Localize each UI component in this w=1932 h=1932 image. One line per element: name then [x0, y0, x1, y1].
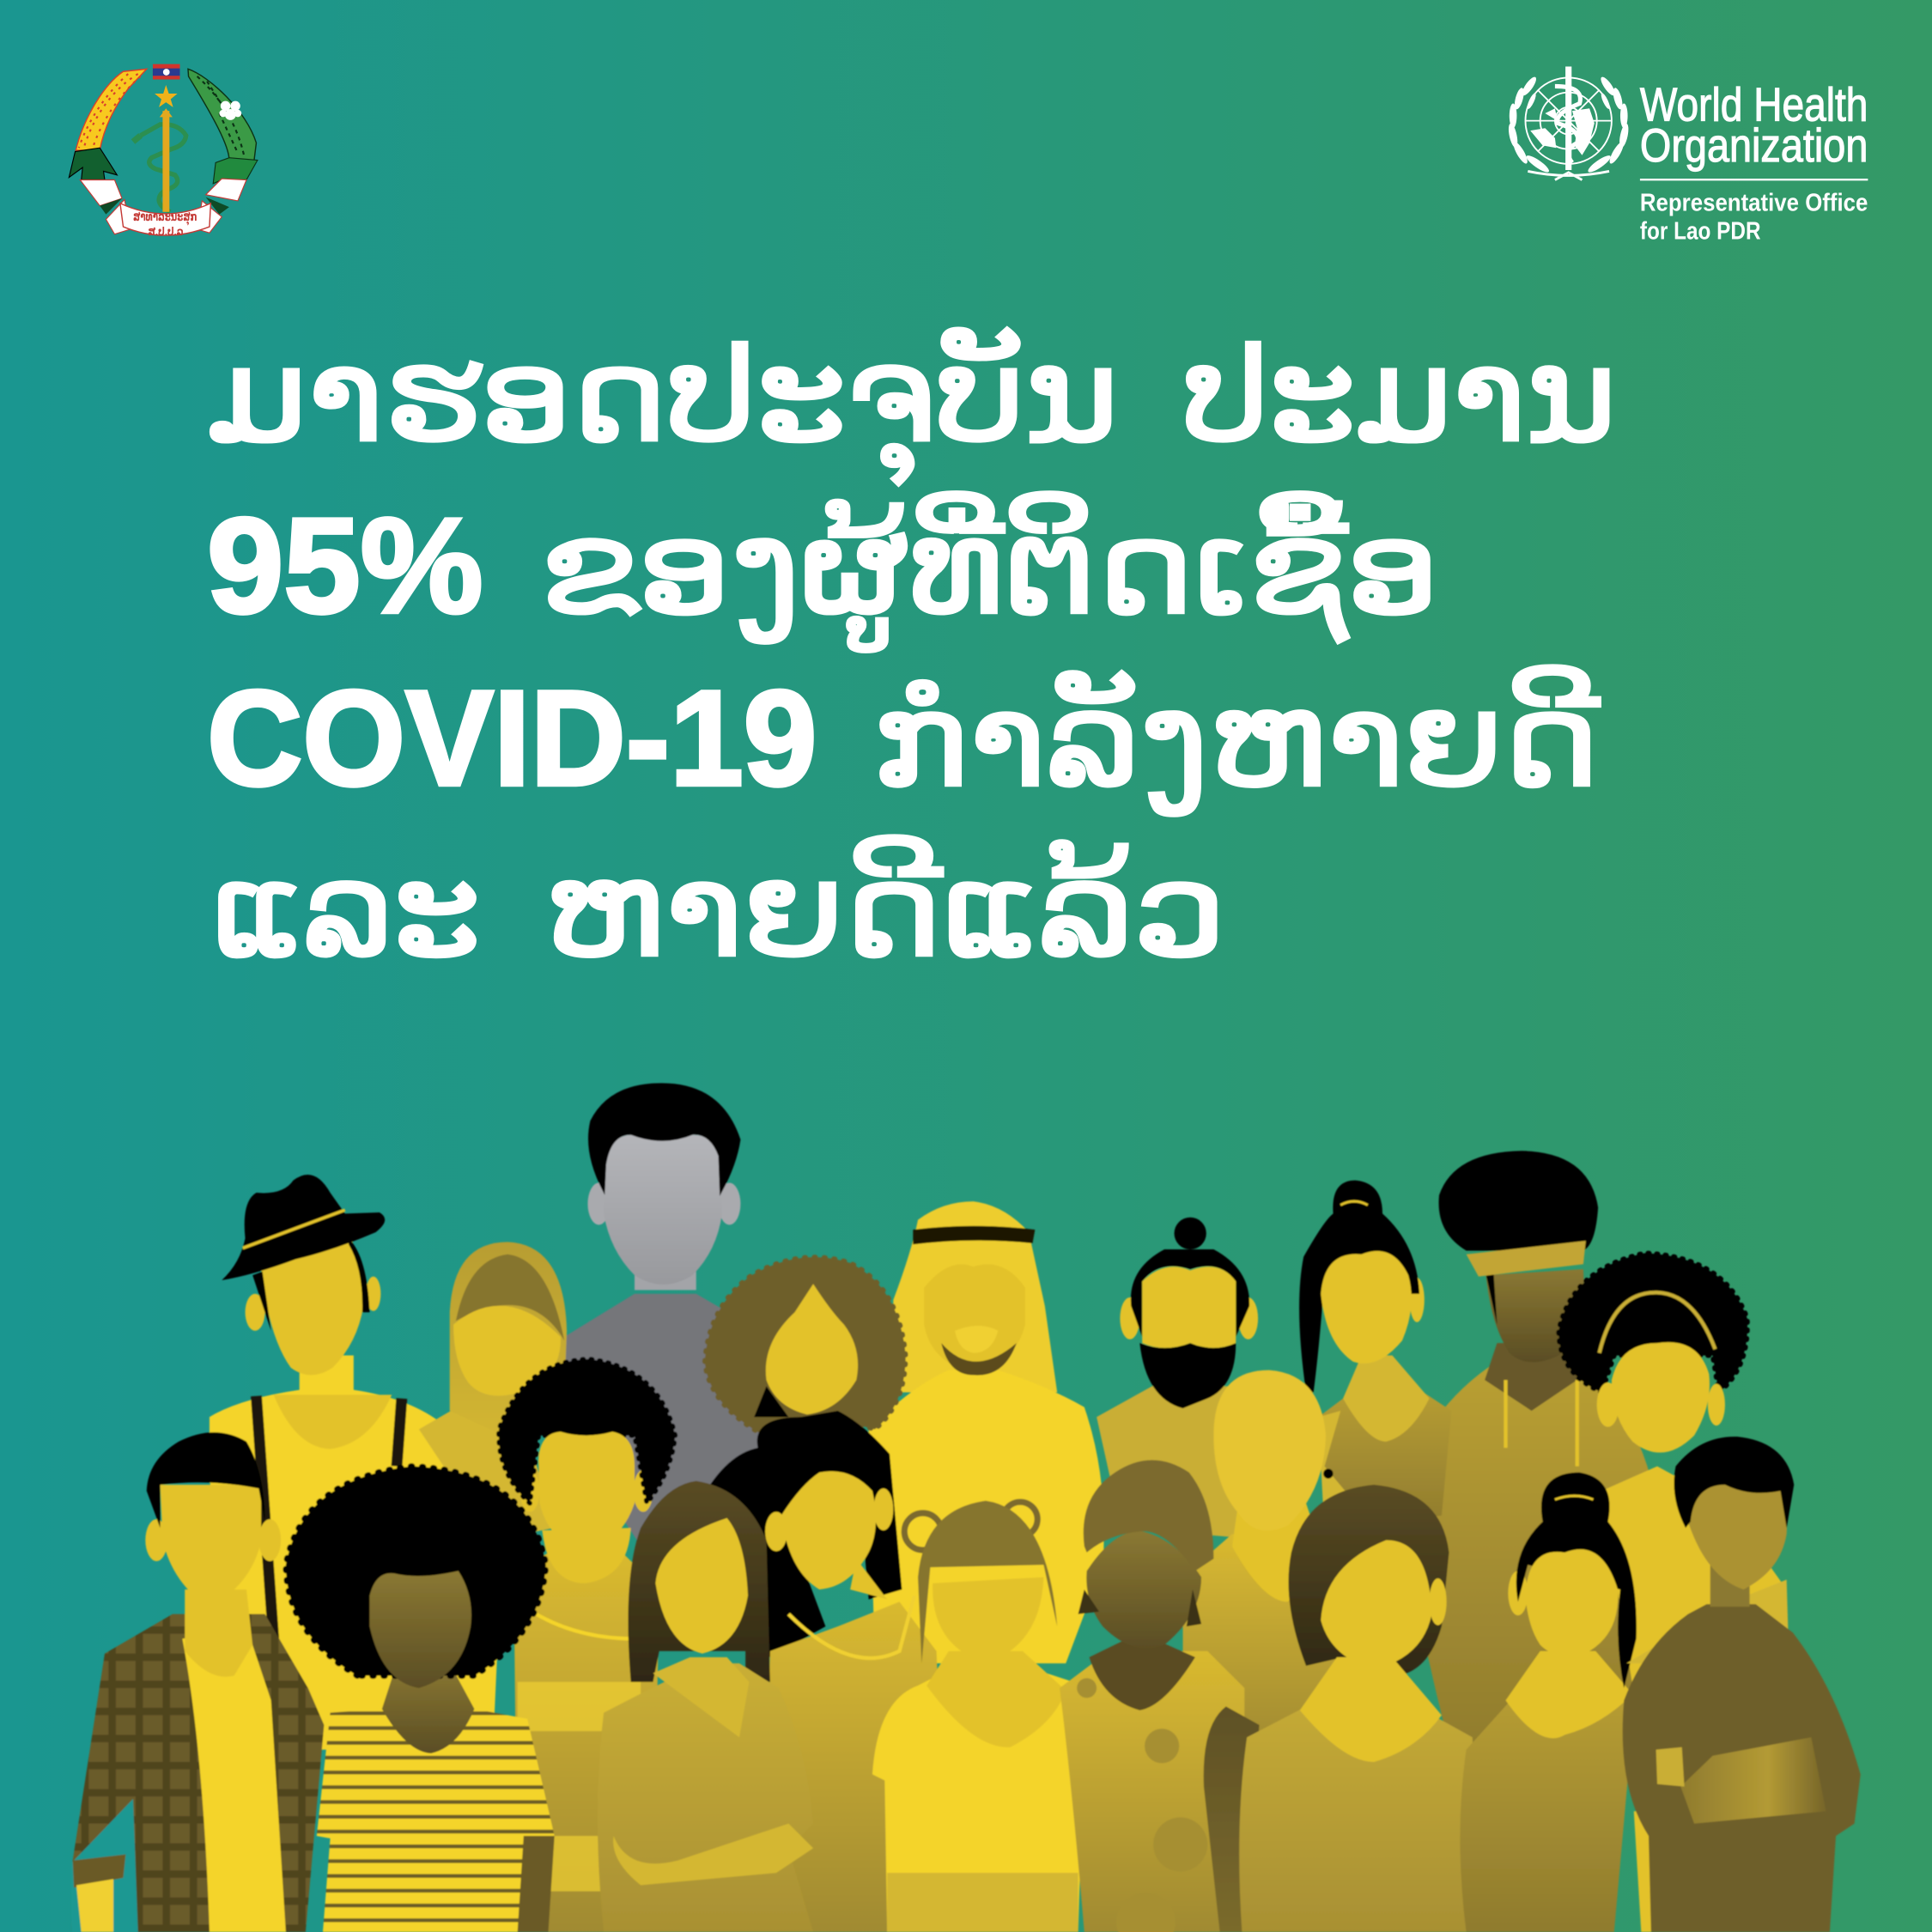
WHO wordmark	[1640, 79, 1868, 245]
person: curly-haired woman	[705, 1257, 906, 1436]
snake and staff	[141, 125, 186, 212]
illustration: crowd of people	[71, 1084, 1861, 1932]
person: man with bun and beard	[1097, 1218, 1306, 1540]
person: hoodie man with afro and headband	[1399, 1151, 1676, 1762]
title: ຂອງຜູ້ທີ່ຕິດເຊື້ອ	[540, 491, 1439, 652]
person: woman with hijab	[419, 1242, 567, 1540]
person: man with earring, pale hair	[1183, 1370, 1355, 1750]
staff and serpent	[1565, 66, 1571, 170]
globe	[1525, 77, 1612, 164]
star	[155, 85, 178, 107]
rice stems	[69, 148, 117, 180]
flag	[153, 64, 180, 80]
title: COVID-19	[207, 663, 817, 814]
WHO wordmark: Representative Office	[1640, 189, 1868, 216]
person: woman with turban	[1060, 1460, 1244, 1932]
green wreath	[188, 69, 256, 162]
title: ແລະ	[212, 839, 481, 982]
left banner	[80, 180, 122, 206]
title: ມາຮອດປະຈຸບັນ	[207, 324, 1119, 485]
scroll ends	[106, 199, 131, 234]
person: front-left man in plaid shirt	[71, 1432, 324, 1932]
laurel wreath	[1507, 75, 1630, 174]
person: woman with bob hair	[1239, 1485, 1474, 1932]
person: woman with big afro and striped tee	[286, 1467, 555, 1932]
title: ປະມານ	[1183, 324, 1617, 467]
person: woman with afro and yellow hairband	[1558, 1253, 1787, 1725]
continents	[1530, 108, 1595, 155]
person: girl with pigtail buns	[872, 1501, 1113, 1932]
white flower	[219, 101, 241, 120]
person: man with rounded afro and striped top	[499, 1359, 675, 1932]
title	[207, 324, 1617, 982]
person: woman with black bun hair	[702, 1411, 949, 1932]
person: woman with ponytail	[1299, 1181, 1451, 1528]
person: grey man at back	[564, 1084, 788, 1564]
person: woman with long straight hair	[598, 1481, 813, 1932]
rice wreath	[76, 69, 147, 150]
WHO wordmark: for Lao PDR	[1640, 217, 1761, 245]
title: ກຳລັງຫາຍດີ	[872, 665, 1600, 816]
emblem text: ສາທາລະນະສຸກ	[133, 210, 197, 226]
person: man with hat and suspenders	[210, 1175, 505, 1750]
title: 95%	[207, 490, 483, 641]
WHO wordmark: World Health	[1640, 79, 1868, 131]
person: dark side arm	[1204, 1706, 1260, 1932]
logo: Lao Ministry of Health emblem	[69, 64, 258, 238]
right banner	[206, 179, 246, 201]
scroll	[120, 204, 210, 235]
logo: WHO emblem	[1507, 66, 1630, 180]
logo: Lao Ministry of Health emblem: ສ.ປ.ປ.ລ	[148, 225, 184, 238]
person: man in headscarf	[869, 1201, 1104, 1663]
title: ຫາຍດີແລ້ວ	[544, 835, 1226, 982]
person: right man with crossed arms	[1623, 1437, 1861, 1932]
person: woman with top bun on the right	[1460, 1473, 1637, 1932]
WHO wordmark: Organization	[1640, 119, 1868, 172]
